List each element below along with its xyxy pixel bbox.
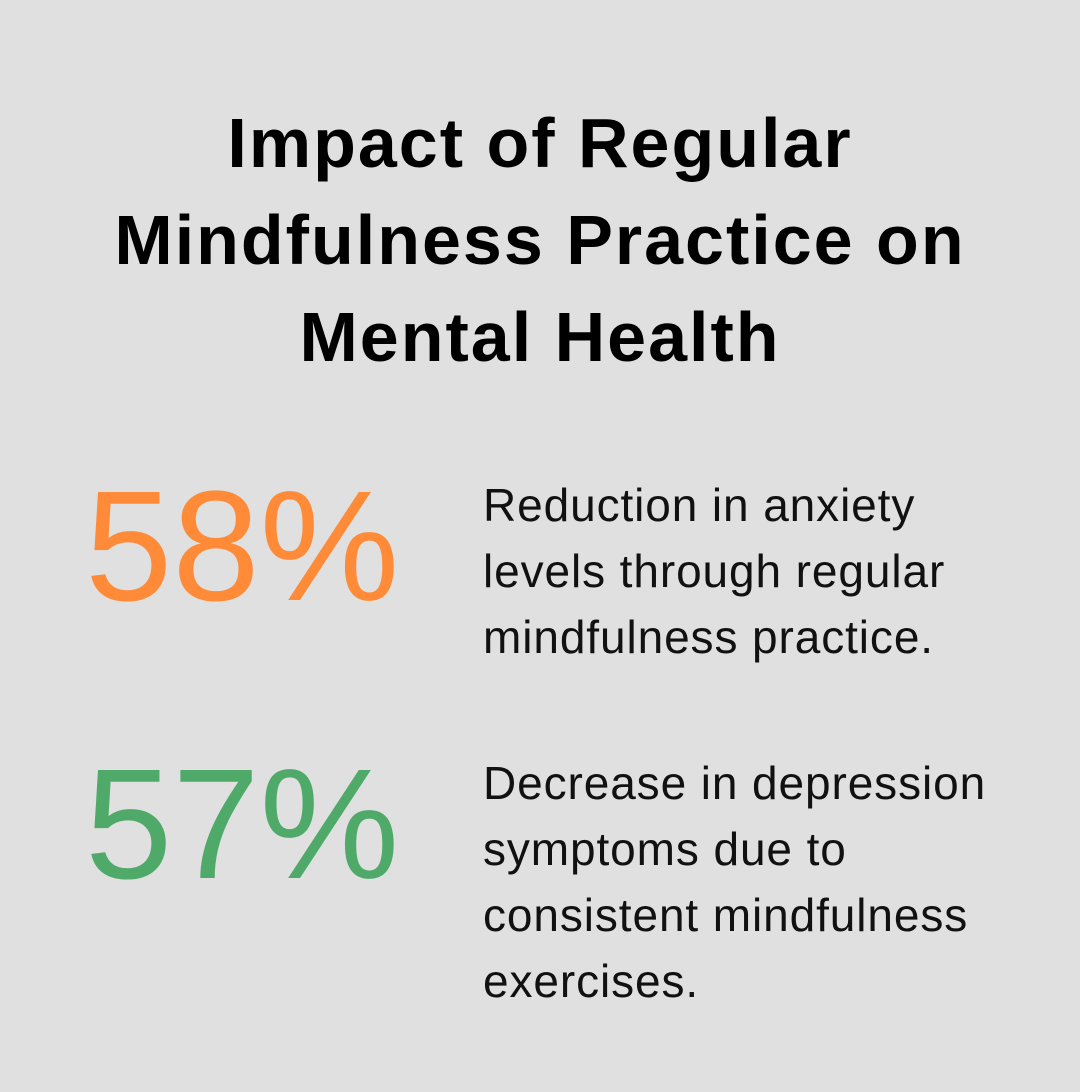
text: anxiety: mindfulness practice. xyxy=(483,611,934,663)
title: Mindfulness Practice on xyxy=(114,201,966,279)
stat: 58%: 58% xyxy=(85,459,399,634)
text: depression: consistent mindfulness xyxy=(483,889,968,941)
text: anxiety: levels through regular xyxy=(483,545,945,597)
text: depression: exercises. xyxy=(483,955,699,1007)
title xyxy=(114,104,966,376)
title: Mental Health xyxy=(299,298,781,376)
text: anxiety xyxy=(483,479,945,663)
text: anxiety: Reduction in anxiety xyxy=(483,479,915,531)
text: depression xyxy=(483,757,986,1007)
title: Impact of Regular xyxy=(227,104,853,182)
text: depression: Decrease in depression xyxy=(483,757,986,809)
stat: 57%: 57% xyxy=(85,737,399,912)
text: depression: symptoms due to xyxy=(483,823,847,875)
